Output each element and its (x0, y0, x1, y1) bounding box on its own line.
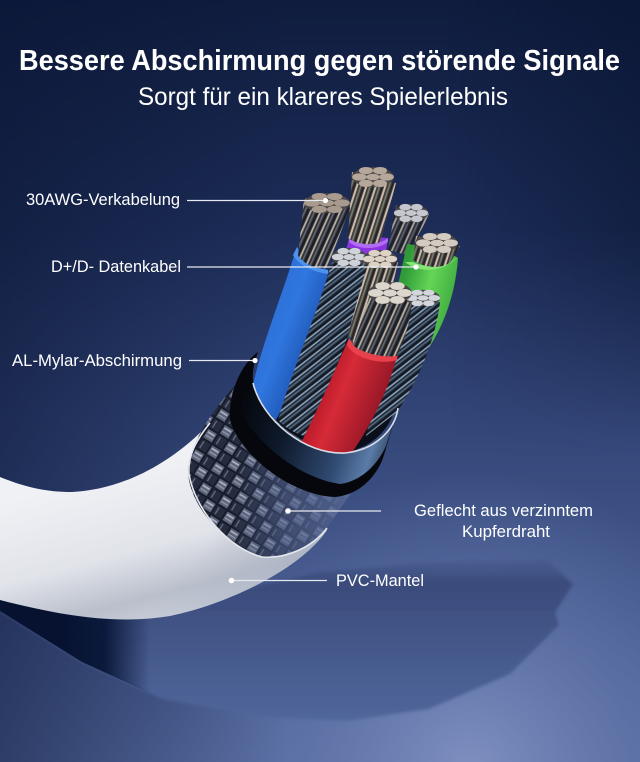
red conductor (300, 294, 412, 460)
blue conductor (253, 198, 350, 420)
strand: purple core conductor (346, 172, 396, 256)
cable shadow (0, 560, 573, 721)
strand end: copper tops (304, 167, 458, 306)
label: Geflecht aus verzinntem Kupferdraht: Geflecht aus verzinntem (414, 502, 593, 520)
heading: Bessere Abschirmung gegen störende Signale (19, 45, 620, 77)
label: D+/D- Datenkabel: D+/D- Datenkabel (51, 258, 181, 276)
label: Geflecht aus verzinntem Kupferdraht (285, 502, 593, 541)
rear strand (345, 262, 398, 345)
PVC jacket (0, 423, 327, 619)
conductors (253, 167, 460, 460)
strand: small rear (388, 205, 430, 255)
label: 30AWG-Verkabelung: 30AWG-Verkabelung (26, 191, 180, 209)
tinned copper braid (188, 375, 380, 557)
label: AL-Mylar-Abschirmung: AL-Mylar-Abschirmung (12, 352, 182, 370)
subtitle: Sorgt für ein klareres Spielerlebnis (138, 83, 508, 111)
label: AL-Mylar-Abschirmung (12, 352, 258, 370)
inner opening (253, 300, 398, 453)
label: PVC-Mantel: PVC-Mantel (336, 572, 424, 590)
cable (0, 300, 398, 619)
green conductor (395, 236, 460, 360)
strand: large steel (278, 262, 367, 437)
strand: right steel (366, 298, 440, 436)
label: Geflecht aus verzinntem Kupferdraht: Kupferdraht (462, 523, 550, 541)
label: 30AWG-Verkabelung (26, 191, 328, 209)
label: PVC-Mantel (229, 572, 424, 590)
label: D+/D- Datenkabel (51, 258, 419, 276)
Al-Mylar shield sleeve (230, 352, 398, 497)
